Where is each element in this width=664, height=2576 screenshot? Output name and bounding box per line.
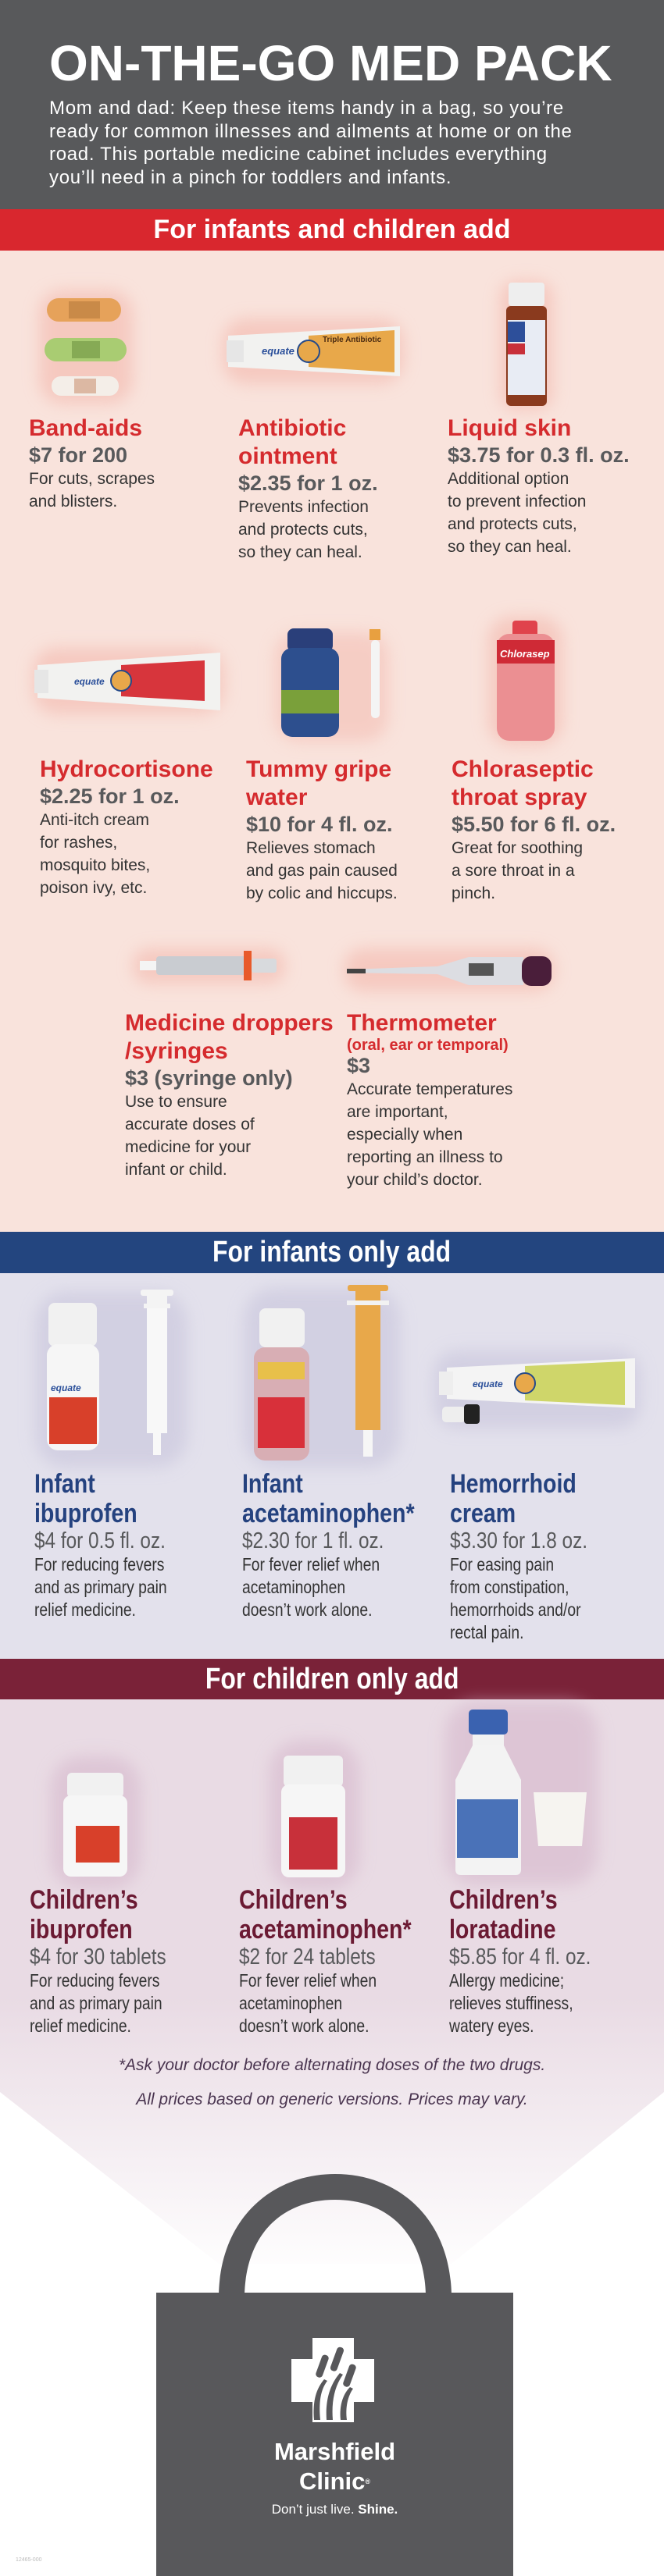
item: chloraseptic: pinch. (452, 884, 495, 902)
item: medicine droppers (125, 1010, 334, 1179)
icon: chloraseptic spray (488, 617, 562, 745)
icon: syringe (133, 948, 285, 984)
section heading: infants only (0, 1232, 664, 1273)
intro text: you’ll need in a pinch for toddlers and infants. (49, 167, 452, 187)
item: band-aids: and blisters. (29, 493, 117, 511)
item: tummy gripe water: Tummy gripe (246, 756, 391, 782)
footnotes: *Ask your doctor before alternating doses of the two drugs. (119, 2056, 545, 2074)
item: children's loratadine (449, 1885, 591, 2036)
item: chloraseptic: throat spray (452, 785, 587, 810)
item: children's ibuprofen: For reducing fevers (30, 1970, 159, 1991)
icon: thermometer (344, 948, 555, 991)
item: children's ibuprofen: and as primary pain (30, 1993, 162, 2013)
item: hydrocortisone: Hydrocortisone (40, 756, 213, 782)
icon: hemorrhoid cream tube (434, 1350, 641, 1429)
item: children's acetaminophen: acetaminophen* (239, 1915, 412, 1944)
item: tummy gripe water: water (246, 785, 307, 810)
item: thermometer: are important, (347, 1103, 448, 1121)
item: hydrocortisone (40, 756, 213, 897)
item: children's acetaminophen: Children’s (239, 1885, 348, 1915)
item: chloraseptic: Great for soothing (452, 839, 583, 857)
item: hemorrhoid cream: $3.30 for 1.8 oz. (450, 1528, 587, 1553)
section heading: children only (0, 1659, 664, 1699)
item: chloraseptic: a sore throat in a (452, 862, 575, 880)
icon: band-aids (39, 290, 133, 404)
section heading: infants only: For infants only add (212, 1236, 452, 1268)
icon: hemorrhoid cream tube: equate (473, 1379, 503, 1389)
item: infant acetaminophen: doesn’t work alone. (242, 1599, 372, 1620)
icon: children's ibuprofen bottle (51, 1756, 141, 1889)
item: chloraseptic: $5.50 for 6 fl. oz. (452, 813, 616, 836)
bag shape (156, 2174, 513, 2576)
item: infant ibuprofen: relief medicine. (34, 1599, 136, 1620)
item: children's acetaminophen: $2 for 24 tablets (239, 1944, 376, 1969)
item: children's loratadine: loratadine (449, 1915, 555, 1944)
item: children's ibuprofen (30, 1885, 166, 2036)
item: band-aids (29, 415, 155, 511)
item: chloraseptic: Chloraseptic (452, 756, 594, 782)
item: liquid skin: to prevent infection (448, 493, 586, 511)
intro text: ready for common illnesses and ailments at home or on the (49, 120, 573, 142)
item: hemorrhoid cream: hemorrhoids and/or (450, 1599, 581, 1620)
item: liquid skin: $3.75 for 0.3 fl. oz. (448, 443, 630, 467)
logo wordmark: Clinic® (299, 2467, 370, 2495)
item: infant acetaminophen: Infant (242, 1469, 303, 1499)
item: children's ibuprofen: $4 for 30 tablets (30, 1944, 166, 1969)
item: infant acetaminophen: For fever relief when (242, 1554, 380, 1574)
item: children's loratadine: Allergy medicine; (449, 1970, 564, 1991)
bag with logo (156, 2174, 513, 2576)
item: children's loratadine: watery eyes. (449, 2016, 534, 2036)
item: antibiotic ointment: Antibiotic (238, 415, 346, 441)
logo wordmark (274, 2438, 395, 2495)
item: medicine droppers: /syringes (125, 1038, 228, 1064)
item: children's loratadine: Children’s (449, 1885, 558, 1915)
icon: hydrocortisone tube: equate (74, 676, 105, 687)
icon: logo cross with cattails (291, 2338, 374, 2422)
item: tummy gripe water: $10 for 4 fl. oz. (246, 813, 393, 836)
item: infant acetaminophen: acetaminophen (242, 1577, 345, 1597)
item: tummy gripe water (245, 756, 398, 902)
title: ON-THE-GO MED PACK (49, 35, 612, 91)
icon: children's loratadine bottle and cup (445, 1702, 598, 1885)
panel: children background with fading funnel (0, 1699, 664, 2217)
item: band-aids: Band-aids (29, 415, 142, 441)
item: thermometer: $3 (347, 1054, 370, 1077)
item: band-aids: $7 for 200 (29, 443, 127, 467)
footnotes (119, 2056, 545, 2108)
item: infant ibuprofen (34, 1469, 167, 1620)
item: infant ibuprofen: Infant (34, 1469, 95, 1499)
item: medicine droppers: $3 (syringe only) (125, 1066, 293, 1090)
item: antibiotic ointment (238, 415, 378, 561)
item: medicine droppers: Use to ensure (125, 1093, 227, 1111)
item: liquid skin: and protects cuts, (448, 515, 577, 533)
icon: antibiotic tube (223, 318, 404, 384)
item: hydrocortisone: poison ivy, etc. (40, 879, 147, 897)
panel: infants only background (0, 1273, 664, 1659)
item: hemorrhoid cream (450, 1469, 587, 1642)
item: thermometer: Accurate temperatures (347, 1080, 512, 1098)
section heading: children only: For children only add (205, 1663, 459, 1695)
icon: infant ibuprofen bottle and syringe: equate (51, 1382, 81, 1393)
item: children's acetaminophen: doesn’t work alone. (239, 2016, 369, 2036)
item: medicine droppers: Medicine droppers (125, 1010, 334, 1036)
item: band-aids: For cuts, scrapes (29, 470, 155, 488)
icon: hydrocortisone tube (33, 648, 224, 714)
section heading: infants and children (0, 209, 664, 251)
item: antibiotic ointment: ointment (238, 443, 337, 469)
icon: chloraseptic spray: Chlorasep (500, 648, 550, 660)
item: liquid skin (448, 415, 630, 556)
section heading: infants and children: For infants and children add (153, 215, 511, 244)
item: children's loratadine: relieves stuffiness, (449, 1993, 573, 2013)
item: infant ibuprofen: and as primary pain (34, 1577, 167, 1597)
icon: antibiotic tube: Triple Antibiotic (323, 336, 382, 344)
item: infant acetaminophen: acetaminophen* (242, 1499, 415, 1528)
item: children's ibuprofen: ibuprofen (30, 1915, 133, 1944)
item: hydrocortisone: Anti-itch cream (40, 811, 149, 829)
intro text: road. This portable medicine cabinet includes everything (49, 144, 548, 165)
item: children's acetaminophen: For fever relief when (239, 1970, 377, 1991)
item: antibiotic ointment: $2.35 for 1 oz. (238, 471, 378, 495)
item: hydrocortisone: mosquito bites, (40, 856, 150, 874)
item: hemorrhoid cream: from constipation, (450, 1577, 569, 1597)
item: liquid skin: so they can heal. (448, 538, 572, 556)
item: hydrocortisone: $2.25 for 1 oz. (40, 785, 180, 808)
item: medicine droppers: infant or child. (125, 1161, 227, 1179)
icon: liquid skin bottle (500, 281, 553, 410)
item: infant ibuprofen: ibuprofen (34, 1499, 137, 1528)
item: hydrocortisone: for rashes, (40, 834, 117, 852)
icon: antibiotic tube: equate (262, 345, 295, 357)
item: hemorrhoid cream: For easing pain (450, 1554, 554, 1574)
item: children's loratadine: $5.85 for 4 fl. oz. (449, 1944, 591, 1969)
item: thermometer: reporting an illness to (347, 1148, 503, 1166)
item: tummy gripe water: by colic and hiccups. (246, 884, 398, 902)
job code: 12465-000 (16, 2557, 41, 2563)
icon: infant ibuprofen bottle and syringe (35, 1290, 187, 1468)
panel: infants and children background (0, 251, 664, 1232)
item: infant ibuprofen: For reducing fevers (34, 1554, 164, 1574)
header panel (0, 0, 664, 209)
item: medicine droppers: medicine for your (125, 1138, 251, 1156)
item: medicine droppers: accurate doses of (125, 1115, 255, 1133)
item: thermometer: especially when (347, 1126, 462, 1144)
item: children's acetaminophen: acetaminophen (239, 1993, 342, 2013)
item: children's ibuprofen: Children’s (30, 1885, 138, 1915)
item: thermometer: your child’s doctor. (347, 1171, 483, 1189)
item: antibiotic ointment: so they can heal. (238, 543, 362, 561)
item: children's acetaminophen (239, 1885, 412, 2036)
item: tummy gripe water: and gas pain caused (246, 862, 398, 880)
item: children's ibuprofen: relief medicine. (30, 2016, 131, 2036)
item: infant acetaminophen (242, 1469, 415, 1620)
item: hemorrhoid cream: cream (450, 1499, 516, 1528)
item: thermometer: (oral, ear or temporal) (347, 1037, 509, 1054)
item: thermometer: Thermometer (347, 1010, 497, 1036)
item: chloraseptic (452, 756, 616, 902)
item: infant ibuprofen: $4 for 0.5 fl. oz. (34, 1528, 166, 1553)
intro text (49, 98, 573, 187)
item: liquid skin: Additional option (448, 470, 569, 488)
item: antibiotic ointment: Prevents infection (238, 498, 369, 516)
tagline: Don’t just live. Shine. (272, 2502, 398, 2517)
item: infant acetaminophen: $2.30 for 1 fl. oz. (242, 1528, 384, 1553)
item: liquid skin: Liquid skin (448, 415, 571, 441)
icon: infant acetaminophen bottle and syringe (244, 1285, 400, 1468)
intro text: Mom and dad: Keep these items handy in a bag, so you’re (49, 98, 564, 119)
icon: children's acetaminophen bottle (270, 1741, 359, 1889)
item: thermometer (347, 1010, 512, 1189)
item: tummy gripe water: Relieves stomach (246, 839, 376, 857)
footnotes: All prices based on generic versions. Prices may vary. (136, 2090, 528, 2108)
item: hemorrhoid cream: Hemorrhoid (450, 1469, 577, 1499)
item: hemorrhoid cream: rectal pain. (450, 1622, 524, 1642)
logo wordmark: Marshfield (274, 2438, 395, 2465)
icon: gripe water bottle and dropper (275, 628, 388, 742)
item: antibiotic ointment: and protects cuts, (238, 521, 368, 539)
